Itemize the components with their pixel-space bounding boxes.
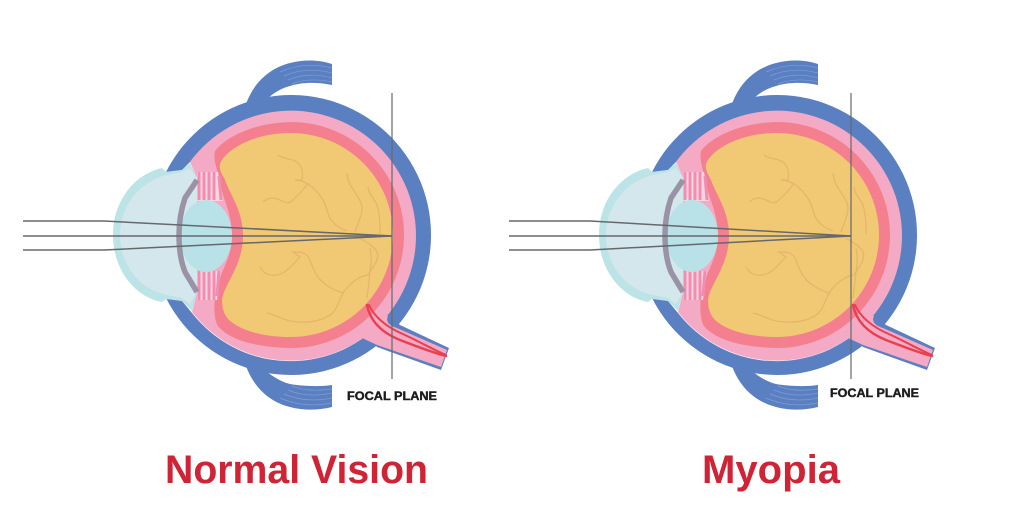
ciliary muscle stripes, top xyxy=(197,172,223,201)
cornea xyxy=(113,163,197,311)
focal plane line: myopia xyxy=(850,93,852,379)
title: normal vision: Normal Vision xyxy=(165,448,428,492)
ciliary muscle stripes, bottom xyxy=(197,271,221,300)
retina: salmon layer xyxy=(214,122,404,348)
choroid: pink layer xyxy=(190,111,416,361)
focal plane label: normal vision: FOCAL PLANE xyxy=(347,391,437,403)
eye diagram: myopia xyxy=(599,60,935,410)
optic nerve pink core xyxy=(360,300,447,367)
crystalline lens xyxy=(180,200,232,272)
eye diagram: normal vision xyxy=(113,60,449,410)
sclera: outer blue wall xyxy=(166,95,431,375)
optic nerve sheath xyxy=(360,312,449,370)
iris xyxy=(179,180,197,292)
retinal veins xyxy=(260,155,380,322)
focal plane line: normal vision xyxy=(391,93,393,379)
top eye muscle xyxy=(246,60,332,104)
retinal blood vessels xyxy=(367,305,446,356)
bottom eye muscle xyxy=(246,366,332,410)
focal plane label: myopia: FOCAL PLANE xyxy=(830,388,919,400)
vitreous body: yellow xyxy=(220,133,393,337)
title: myopia: Myopia xyxy=(702,448,841,492)
light rays: normal vision xyxy=(23,221,392,250)
light rays: myopia xyxy=(509,221,851,250)
